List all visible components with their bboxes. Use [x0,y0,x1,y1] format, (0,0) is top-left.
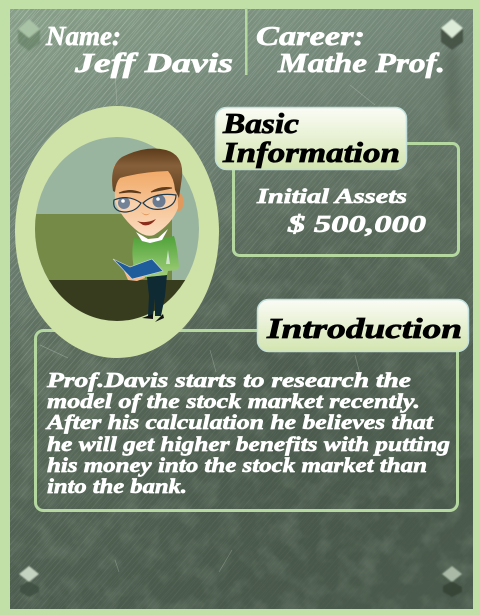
introduction body text: he will get higher benefits with putting [47,432,450,456]
career value: Mathe Prof. [277,48,445,78]
divider between name and career [245,8,248,75]
panel outline [234,144,458,256]
character: professor reading [112,149,184,322]
eyes [118,197,130,209]
portrait background [35,137,199,321]
introduction body text: After his calculation he believes that [45,410,434,434]
introduction body text [45,368,450,498]
mouth [137,219,156,225]
ear [174,193,184,211]
panel: basic information [216,108,458,256]
icon: screw bottom right [442,566,462,597]
collar [136,229,168,243]
career label: Career: [256,21,365,51]
heading tab: basic information: Basic [222,108,299,140]
nose [141,212,150,215]
initial assets value: $ 500,000 [287,212,426,238]
icon: screw top right [441,19,463,50]
face [114,165,178,236]
heading tab: basic information [216,108,406,170]
outer ring [15,106,219,358]
heading tab: introduction [258,300,468,352]
career field [256,21,445,78]
sweater [132,236,179,278]
glasses [114,194,176,212]
introduction body text: model of the stock market recently. [47,389,420,413]
eyebrows [119,188,172,193]
panel outline [36,330,458,510]
heading tab: basic information: Information [222,137,400,169]
shoes [142,314,164,322]
heading tab: introduction: Introduction [266,313,462,345]
book [113,259,163,279]
initial assets label: Initial Assets [256,184,407,208]
hair [112,149,182,198]
portrait medallion [15,106,219,358]
name value: Jeff Davis [74,48,233,78]
legs [147,275,167,316]
introduction body text: his money into the stock market than [47,453,427,477]
icon: screw bottom left [19,566,39,597]
panel: introduction [36,330,458,510]
name label: Name: [45,21,121,51]
introduction body text: Prof.Davis starts to research the [46,368,411,392]
introduction body text: into the bank. [47,474,187,498]
hand [124,270,145,281]
name field [45,21,233,78]
icon: screw top left [18,19,40,51]
